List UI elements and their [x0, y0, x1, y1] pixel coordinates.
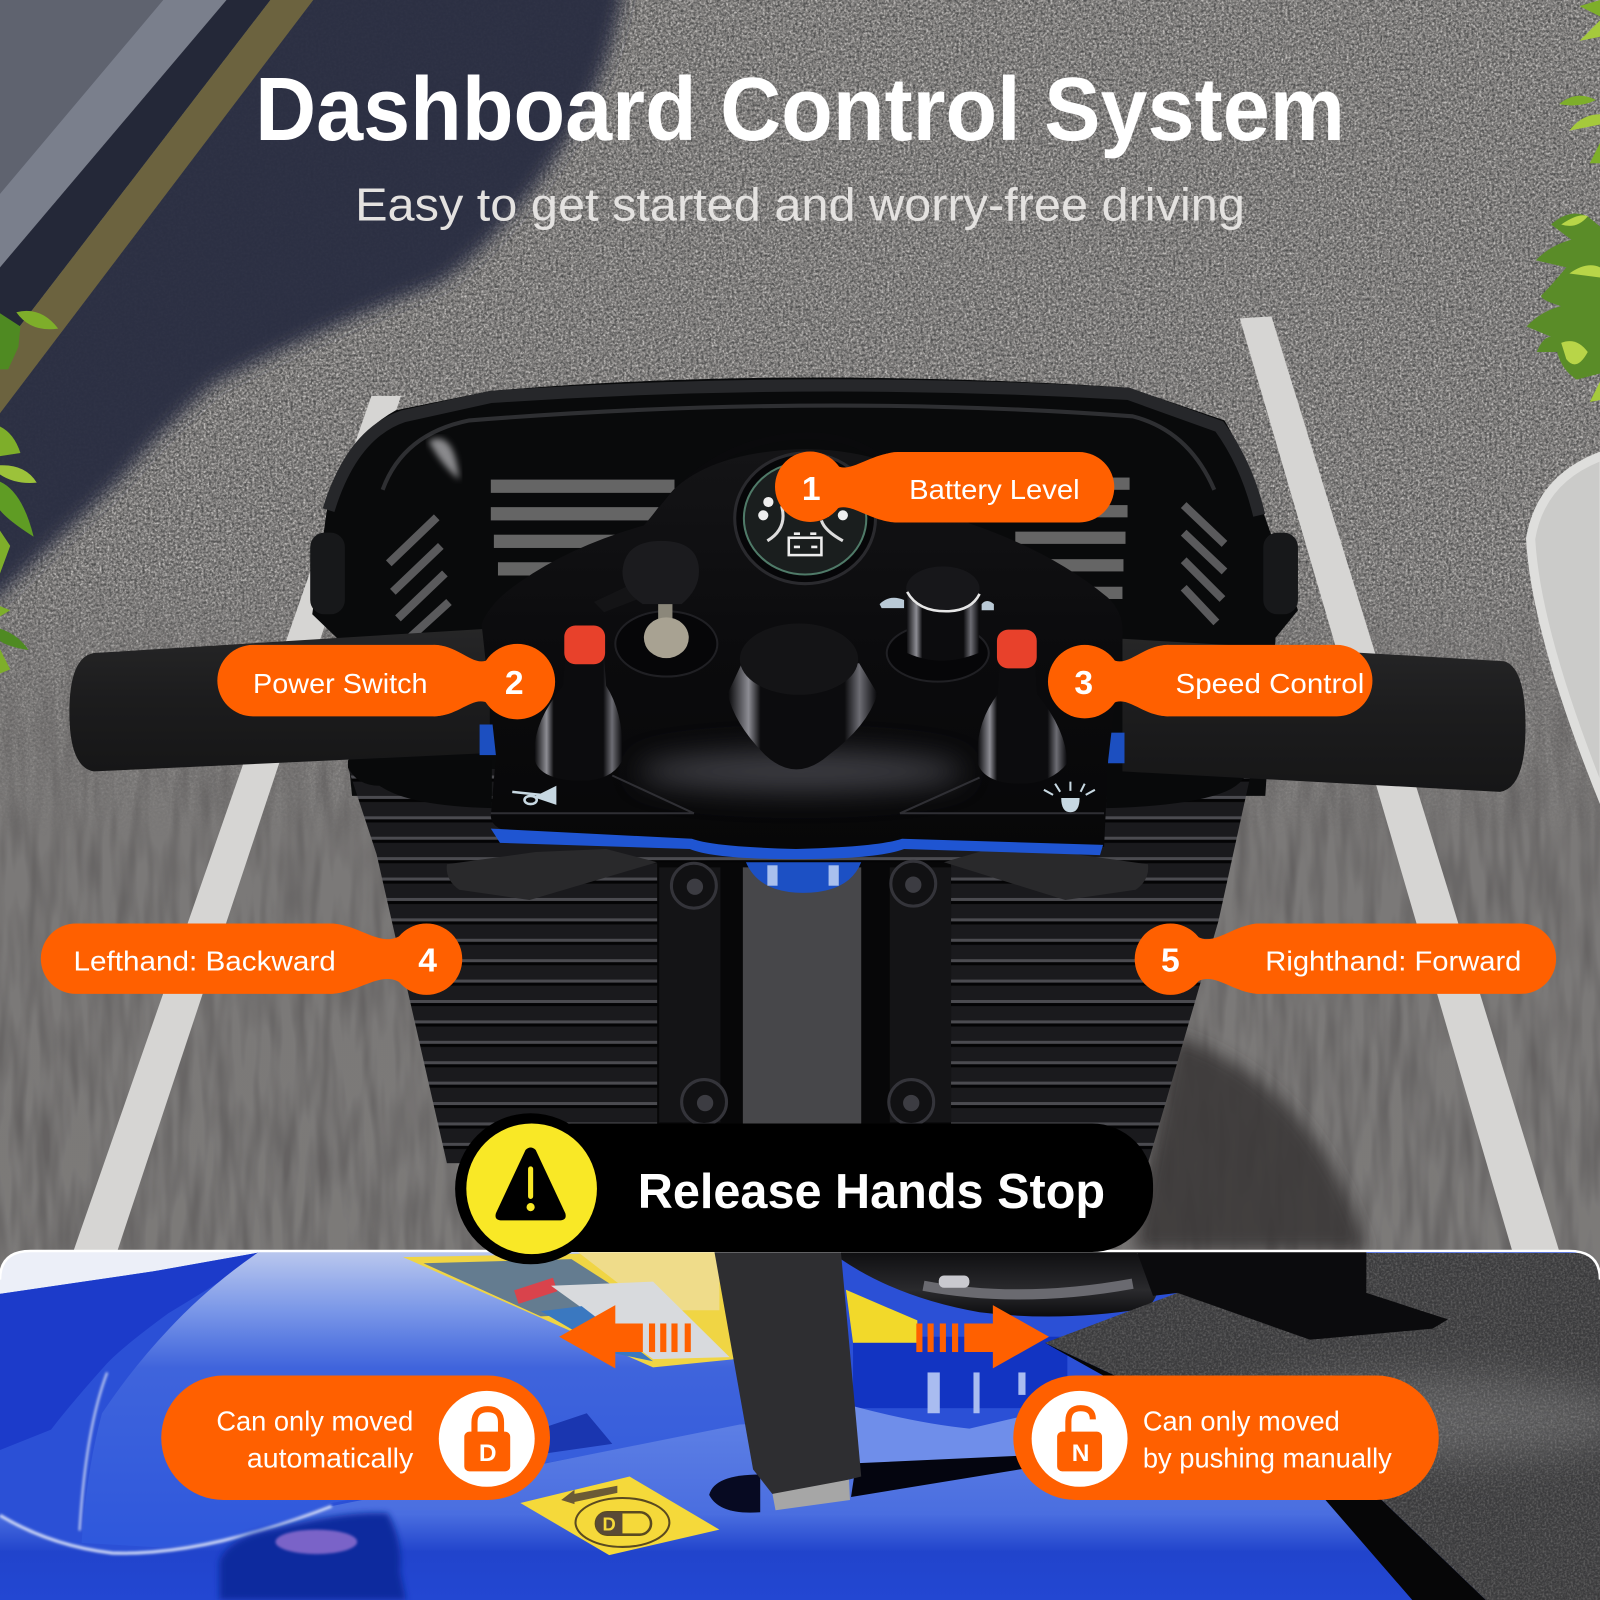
label: Power Switch	[253, 668, 428, 699]
floor dark block	[1137, 1251, 1448, 1340]
plants: left	[0, 311, 58, 673]
handlebar grip: left	[69, 629, 490, 771]
shroud reflections	[928, 1372, 1026, 1413]
sticker D mark	[596, 1512, 622, 1535]
warning triangle	[496, 1147, 566, 1220]
key tether	[594, 584, 641, 612]
horn button: left	[534, 626, 623, 781]
toggle collar	[644, 617, 689, 658]
right floor	[1020, 1251, 1600, 1600]
speed dial	[887, 566, 989, 682]
basket: lower front	[348, 760, 1250, 1163]
screw: upper left	[671, 863, 716, 908]
lane lines	[73, 316, 1559, 1251]
speed label marks	[880, 598, 994, 610]
label: Righthand: Forward	[1265, 945, 1521, 976]
handle clip: right	[1263, 533, 1298, 614]
dial rim highlight	[907, 592, 980, 611]
callout 3: Speed Control	[1048, 645, 1372, 718]
dark blue shroud band	[0, 1251, 267, 1450]
right light shroud	[854, 1406, 1017, 1463]
warning pill	[455, 1113, 1153, 1264]
battery gauge	[735, 453, 876, 584]
text: Can only moved	[1143, 1406, 1340, 1437]
gauge arcs	[767, 506, 843, 541]
blue trim strip	[491, 829, 1103, 859]
blue side trims	[480, 724, 1124, 763]
label: Battery Level	[909, 474, 1080, 505]
hood edge streak	[80, 1372, 107, 1531]
sticker tile: photo	[551, 1282, 730, 1359]
slats: back right	[1015, 478, 1130, 599]
pill: manual mode	[1013, 1376, 1439, 1500]
number: 3	[1074, 665, 1093, 702]
shroud hood	[82, 1251, 776, 1547]
arrow: right	[916, 1305, 1049, 1368]
callout 2: Power Switch	[217, 644, 555, 719]
plants: right	[1527, 0, 1600, 402]
warning icon circle	[466, 1123, 597, 1254]
slats: back left	[491, 480, 674, 576]
callout 1: Battery Level	[775, 452, 1114, 522]
reflection: knob upper	[548, 1413, 612, 1453]
text: Can only moved	[216, 1406, 413, 1437]
panel top border	[0, 1251, 1600, 1280]
control cable	[635, 436, 1041, 673]
black column base	[841, 1251, 1160, 1316]
sidewalk and yellow curb	[0, 0, 313, 413]
light button: right	[977, 630, 1067, 784]
sticker tile: red cross	[514, 1278, 557, 1304]
sticker text block	[577, 1251, 719, 1310]
white corner highlight	[0, 1251, 267, 1294]
number: 5	[1161, 942, 1180, 979]
yellow block right of stem	[846, 1290, 917, 1343]
basket shadow	[1133, 1036, 1367, 1251]
icon: locked padlock D	[439, 1391, 535, 1487]
screw: lower right	[889, 1080, 934, 1124]
number: 4	[418, 942, 437, 979]
screw: upper right	[891, 861, 936, 906]
slot in shroud: left	[709, 1474, 760, 1513]
slats: side right	[1184, 505, 1224, 622]
slats: side left	[389, 517, 449, 643]
number: 2	[505, 665, 524, 702]
sticker tile: dark	[424, 1259, 610, 1316]
icon: open padlock N	[1032, 1391, 1128, 1487]
warning text: Release Hands Stop	[638, 1165, 1105, 1219]
exclamation mark	[527, 1166, 535, 1211]
reflection: knob lower	[219, 1513, 406, 1600]
sticker arrow	[561, 1486, 617, 1504]
fold highlight	[0, 1506, 332, 1553]
stem metal bracket	[772, 1480, 850, 1510]
handlebar grip: right	[1122, 639, 1526, 792]
arrow: left	[559, 1305, 691, 1368]
centre mount panels	[657, 862, 951, 1130]
lower detail panel	[0, 1251, 1600, 1600]
warning label sticker	[403, 1251, 755, 1367]
sticker D text: D	[603, 1514, 616, 1535]
light icon	[1044, 782, 1095, 812]
stem lower part	[714, 1251, 861, 1498]
pill: automatic mode	[161, 1376, 550, 1500]
battery icon	[789, 534, 821, 555]
inner gloss reflection	[429, 438, 459, 480]
blue below yellow	[853, 1342, 916, 1343]
steering stem	[743, 862, 861, 1133]
key knob	[622, 541, 699, 604]
slot in shroud: right	[851, 1455, 1033, 1497]
dashboard console	[482, 436, 1123, 859]
plate edges	[491, 776, 1104, 813]
label: Speed Control	[1176, 668, 1364, 699]
basket lip: right	[1106, 765, 1250, 808]
callout 5: Righthand Forward	[1135, 923, 1556, 995]
sticker tile: blue	[541, 1306, 653, 1361]
lower shroud	[0, 1418, 1412, 1600]
horn icon	[512, 788, 555, 804]
toggle stem	[658, 602, 672, 627]
power key switch	[594, 541, 717, 677]
subtitle: Easy to get started and worry-free driving	[355, 178, 1245, 230]
icon: locked padlock D: D	[479, 1440, 497, 1467]
mound sheen	[638, 751, 964, 792]
dial top	[906, 566, 980, 611]
centre joystick cap	[728, 623, 878, 769]
text line 2: automatically	[247, 1442, 413, 1473]
lock sticker	[520, 1477, 719, 1555]
console body	[482, 449, 1123, 851]
right saturated shroud	[853, 1337, 1067, 1408]
handle clip: left	[310, 533, 345, 614]
blue collar	[746, 862, 861, 893]
number: 1	[802, 471, 821, 508]
floor edge	[1045, 1343, 1486, 1600]
curved kerb at right	[1531, 455, 1600, 802]
icon: open padlock N: N	[1072, 1440, 1089, 1467]
gauge dots	[758, 497, 848, 520]
handle brackets	[447, 849, 1148, 900]
dial body	[906, 590, 980, 661]
sticker lock pill	[596, 1512, 651, 1535]
column highlight	[939, 1276, 969, 1288]
basket: upper rear	[310, 378, 1298, 796]
road shadow	[0, 0, 628, 612]
screw: lower left	[682, 1080, 727, 1124]
callout 4: Lefthand Backward	[41, 923, 462, 995]
road background	[0, 0, 1600, 1253]
text line 2: by pushing manually	[1143, 1442, 1392, 1473]
label: Lefthand: Backward	[73, 945, 336, 976]
title: Dashboard Control System	[255, 60, 1345, 160]
basket lip: left	[348, 760, 492, 808]
